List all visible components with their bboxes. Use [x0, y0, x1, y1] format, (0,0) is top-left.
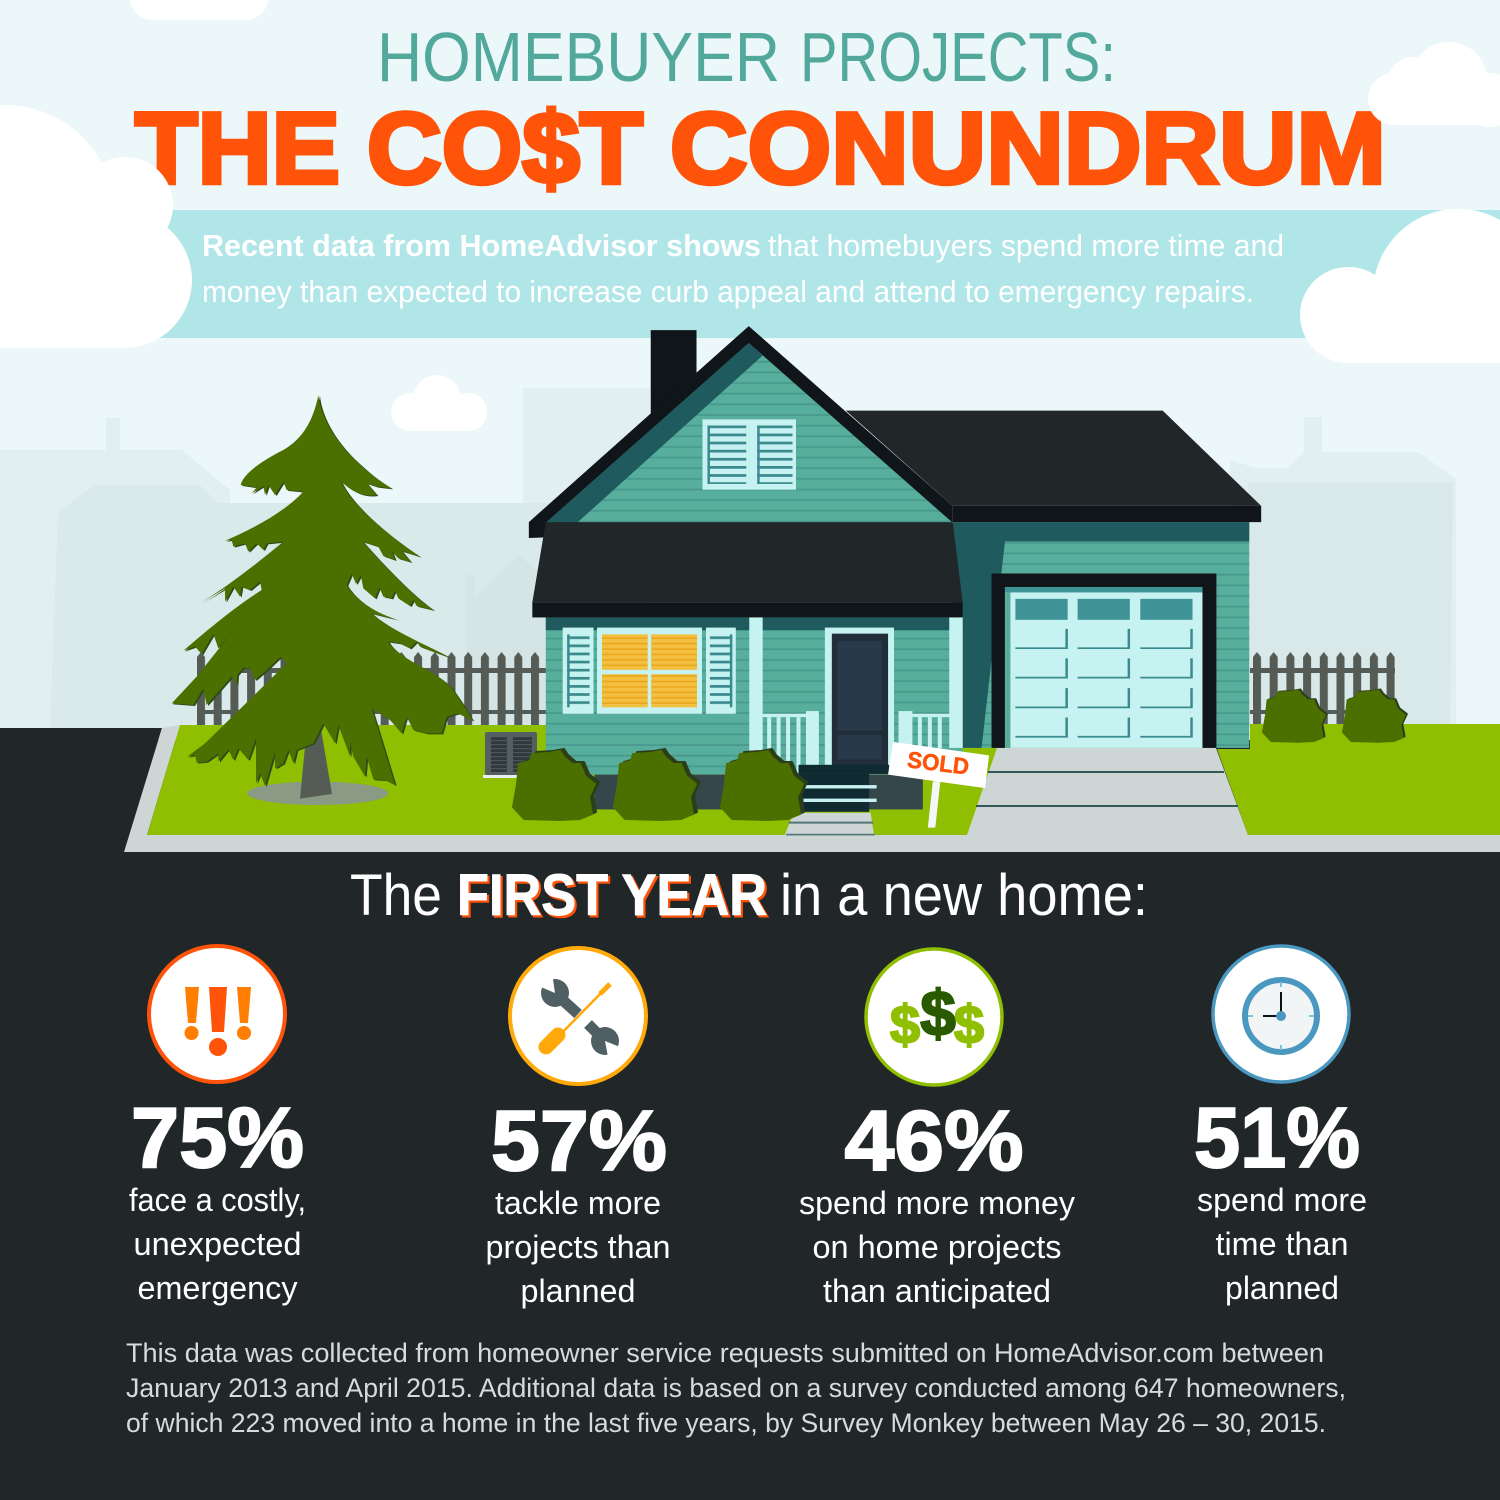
gable roof trim — [529, 326, 953, 538]
lower roof — [532, 522, 963, 602]
stat: 46%: than anticipated — [823, 1273, 1051, 1309]
stat: 51%: spend more — [1197, 1182, 1367, 1218]
stat: 75%: 75% — [131, 1091, 304, 1186]
intro text: that homebuyers spend more time and — [768, 228, 1284, 263]
stat: 46% — [799, 1094, 1075, 1309]
cloud: top right — [1368, 42, 1500, 127]
bush 5 — [1343, 689, 1407, 742]
right shutter — [706, 628, 736, 714]
title line 1: HOMEBUYER — [377, 18, 780, 96]
stat: 46%: 46% — [844, 1094, 1024, 1189]
porch railing left — [763, 711, 819, 774]
porch railing right — [898, 711, 950, 748]
stat: 51%: time than — [1216, 1226, 1348, 1262]
footnote: This data was collected from homeowner service requests submitted on HomeAdvisor.com between — [126, 1338, 1324, 1368]
title line 1 — [377, 18, 1116, 96]
garage roof — [846, 411, 1261, 506]
gable vent — [702, 419, 796, 490]
title line 2 — [135, 93, 1386, 205]
footnote: January 2013 and April 2015. Additional data is based on a survey conducted among 647 homeowners, — [126, 1373, 1346, 1403]
icon: exclamation marks — [149, 946, 285, 1082]
background city skyline — [0, 388, 1456, 728]
lower siding — [546, 617, 963, 775]
intro band — [0, 210, 1500, 338]
curb / sidewalk — [124, 725, 1500, 852]
tree shadow ellipse — [247, 782, 388, 805]
gable wall shadow — [546, 343, 763, 523]
stat: 75% — [129, 1091, 306, 1306]
section heading: in a new home: — [780, 863, 1148, 928]
cloud: small center — [391, 375, 487, 431]
title line 2: THE — [135, 93, 340, 205]
cloud: top left small — [130, 0, 268, 20]
stat: 46%: spend more money — [799, 1185, 1075, 1221]
left shutter — [563, 628, 594, 714]
title line 1: PROJECTS: — [800, 18, 1116, 96]
bush 1 — [513, 749, 599, 820]
sold sign board — [888, 742, 989, 788]
stat: 75%: face a costly, — [129, 1182, 306, 1218]
stat: 46%: on home projects — [812, 1229, 1062, 1265]
section heading: The — [350, 863, 442, 928]
stat: 75%: emergency — [138, 1270, 298, 1306]
sky background — [0, 0, 1500, 740]
stat: 57%: planned — [520, 1273, 636, 1309]
bush 2 — [614, 749, 700, 820]
bush 3 — [721, 749, 807, 820]
stat: 51%: 51% — [1194, 1091, 1360, 1186]
title line 2: CONUNDRUM — [670, 93, 1386, 205]
intro text — [202, 228, 1284, 309]
tree — [172, 395, 474, 805]
foliage — [172, 395, 473, 786]
foundation — [595, 775, 923, 809]
cloud: right large — [1300, 209, 1500, 363]
lower fascia — [532, 602, 963, 617]
garage fascia — [953, 506, 1261, 522]
stat: 57% — [486, 1094, 670, 1309]
chimney — [651, 330, 697, 418]
fence right — [1250, 652, 1395, 726]
icon: dollar signs: $ — [890, 995, 920, 1055]
title line 2: CO$T — [367, 93, 643, 205]
fence left — [197, 652, 546, 726]
gable wall — [546, 343, 953, 523]
icon: clock — [1213, 946, 1349, 1082]
garage door — [1005, 587, 1202, 748]
section heading: FIRST YEAR — [459, 865, 769, 930]
intro text: Recent data from HomeAdvisor shows — [202, 228, 761, 263]
tree trunk — [300, 723, 332, 799]
lower wall shadow — [546, 617, 963, 630]
icon: dollar signs: $ — [954, 995, 984, 1055]
garage wall shadow — [953, 522, 1249, 748]
front door — [825, 628, 894, 765]
porch columns — [749, 617, 963, 773]
foliage shadow — [173, 396, 474, 787]
stat: 57%: tackle more — [495, 1185, 661, 1221]
lit window — [597, 628, 702, 714]
icon: wrench and screwdriver — [510, 948, 646, 1084]
garage wall — [953, 522, 1249, 748]
lawn right — [1217, 724, 1500, 835]
stat: 51%: planned — [1225, 1270, 1339, 1306]
icon: dollar signs — [866, 949, 1002, 1085]
sold sign post — [928, 781, 940, 828]
stat: 57%: projects than — [486, 1229, 670, 1265]
garage siding — [953, 522, 1249, 748]
lawn left — [147, 725, 1000, 835]
icon: dollar signs: $ — [920, 977, 956, 1049]
footnote: of which 223 moved into a home in the last five years, by Survey Monkey between May 26 – 30, 2015. — [126, 1408, 1326, 1438]
driveway — [967, 748, 1248, 835]
AC unit — [483, 732, 537, 778]
house — [529, 326, 1261, 835]
section heading: FIRST YEAR — [457, 863, 767, 928]
garage door frame — [992, 574, 1216, 748]
bush 4 — [1263, 689, 1327, 742]
gable siding — [546, 343, 953, 523]
stat: 57%: 57% — [491, 1094, 667, 1189]
dark lower background — [0, 728, 1500, 1500]
porch steps — [798, 765, 889, 812]
stat: 51% — [1194, 1091, 1367, 1306]
intro text: money than expected to increase curb appeal and attend to emergency repairs. — [202, 274, 1254, 309]
cloud: left large — [0, 105, 192, 348]
walkway — [785, 813, 875, 835]
sold sign text: SOLD — [906, 746, 971, 780]
section heading — [350, 863, 1148, 930]
lower wall — [546, 617, 963, 775]
footnote — [126, 1338, 1346, 1438]
stat: 75%: unexpected — [134, 1226, 302, 1262]
